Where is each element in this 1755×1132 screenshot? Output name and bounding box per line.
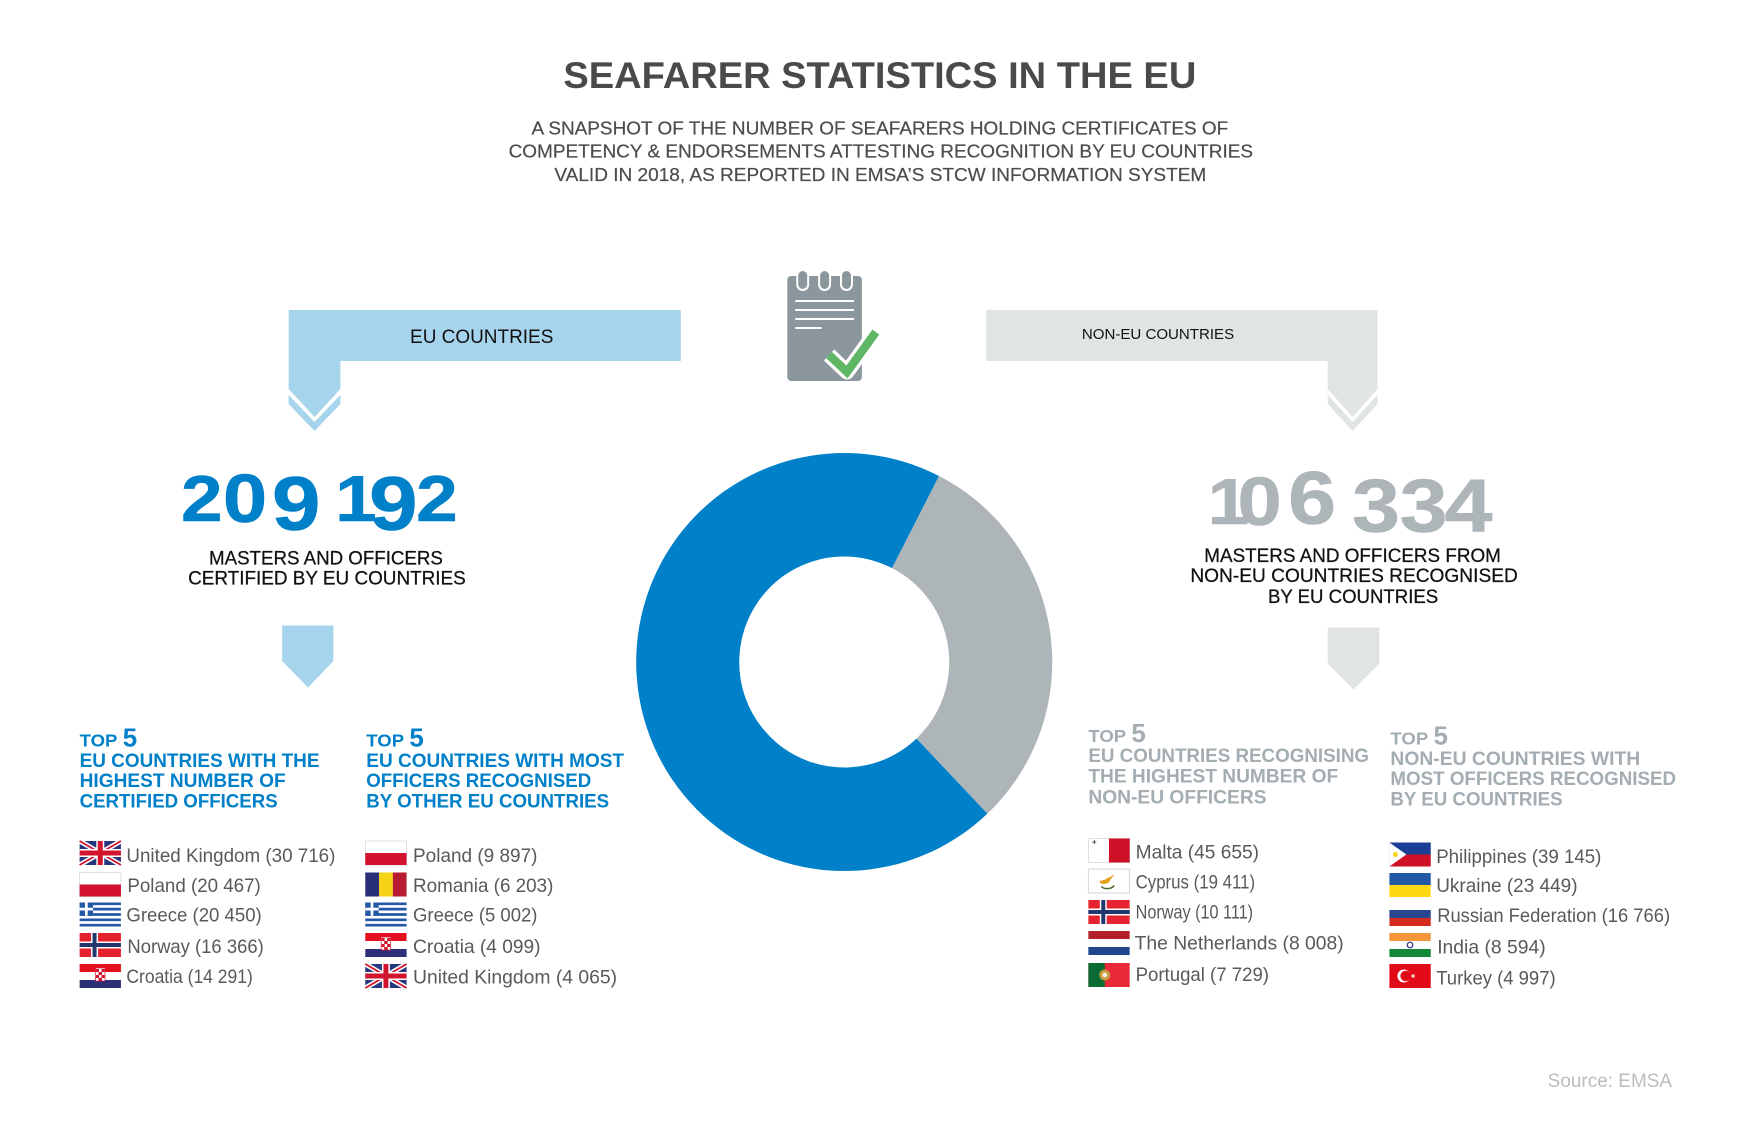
panel: top 5 EU recognised by other EU (365, 724, 624, 989)
list: Turkey (4 997) (1436, 968, 1556, 990)
heading: THE HIGHEST NUMBER OF (1088, 766, 1338, 788)
heading: EU COUNTRIES RECOGNISING (1088, 746, 1369, 767)
caption: non-EU: NON-EU COUNTRIES RECOGNISED (1190, 566, 1518, 587)
list: Croatia (14 291) (126, 967, 253, 988)
subtitle text block: COMPETENCY & ENDORSEMENTS ATTESTING RECOGNITION BY EU COUNTRIES (509, 140, 1253, 162)
big number: EU: 2 (181, 463, 223, 535)
panel: non-EU countries banner arrow (986, 310, 1377, 431)
big number: EU: 9 (369, 462, 418, 547)
list (365, 841, 617, 989)
list: United Kingdom (4 065) (413, 967, 617, 989)
big number: EU (181, 460, 458, 547)
arrow: EU down (282, 626, 333, 688)
panel: top 5 EU recognising non-EU (1088, 720, 1369, 987)
heading: EU COUNTRIES WITH THE (80, 751, 319, 772)
list: Poland (20 467) (127, 876, 261, 897)
heading: BY OTHER EU COUNTRIES (366, 791, 609, 813)
icon: notepad with check mark (787, 270, 876, 381)
heading: HIGHEST NUMBER OF (80, 771, 286, 792)
list: The Netherlands (8 008) (1135, 933, 1344, 955)
heading: MOST OFFICERS RECOGNISED (1390, 769, 1676, 790)
list: Russian Federation (16 766) (1437, 906, 1670, 927)
list: Romania (6 203) (413, 876, 553, 897)
panel: EU countries banner arrow (289, 310, 681, 431)
list (1088, 838, 1344, 987)
segment: non-EU recognised (892, 476, 1052, 814)
heading: TOP 5 (1390, 722, 1448, 751)
list: Ukraine (23 449) (1436, 876, 1578, 897)
caption: non-EU (1190, 546, 1518, 608)
panel: non-EU countries banner arrow: NON-EU COUNTRIES (1082, 326, 1234, 343)
heading: TOP 5 (366, 724, 424, 753)
list: Portugal (7 729) (1136, 965, 1269, 986)
big number: non-EU: 4 (1444, 465, 1493, 548)
heading: TOP 5 (80, 724, 137, 753)
big number: non-EU: 0 (1237, 463, 1282, 540)
list: Greece (20 450) (126, 905, 262, 927)
arrow: non-EU down (1328, 628, 1379, 690)
heading: NON-EU OFFICERS (1088, 787, 1267, 809)
list (80, 841, 335, 988)
heading: CERTIFIED OFFICERS (80, 791, 278, 813)
source note: Source: EMSA (1548, 1071, 1672, 1092)
title: SEAFARER STATISTICS IN THE EU (563, 55, 1196, 96)
heading (80, 724, 319, 813)
heading: OFFICERS RECOGNISED (366, 771, 591, 792)
segment: EU certified (636, 453, 987, 871)
caption: EU: MASTERS AND OFFICERS (209, 548, 443, 570)
big number: EU: 9 (272, 462, 320, 547)
list: Cyprus (19 411) (1136, 872, 1255, 894)
list: Croatia (4 099) (413, 937, 540, 958)
panel: top 5 EU certified (80, 724, 335, 988)
heading: NON-EU COUNTRIES WITH (1390, 749, 1640, 770)
heading (1088, 720, 1369, 809)
heading (366, 724, 624, 813)
big number: non-EU: 1 (1208, 466, 1249, 538)
panel: top 5 non-EU recognised (1389, 722, 1676, 990)
list: Poland (9 897) (413, 846, 537, 867)
big number: non-EU (1208, 457, 1493, 548)
heading: TOP 5 (1088, 720, 1146, 748)
list: Greece (5 002) (413, 905, 537, 927)
big number: EU: 1 (335, 463, 377, 535)
caption: non-EU: MASTERS AND OFFICERS FROM (1204, 546, 1501, 567)
list: Norway (10 111) (1136, 902, 1253, 924)
list (1389, 842, 1670, 990)
caption: non-EU: BY EU COUNTRIES (1268, 587, 1438, 608)
big number: non-EU: 3 (1352, 465, 1400, 548)
list: United Kingdom (30 716) (126, 846, 335, 867)
list: Malta (45 655) (1136, 842, 1259, 864)
caption: EU: CERTIFIED BY EU COUNTRIES (188, 568, 466, 590)
subtitle text block (509, 117, 1253, 185)
heading: BY EU COUNTRIES (1390, 789, 1563, 811)
list: Norway (16 366) (127, 937, 264, 958)
heading (1390, 722, 1676, 811)
subtitle text block: VALID IN 2018, AS REPORTED IN EMSA’S STCW INFORMATION SYSTEM (554, 164, 1206, 185)
panel: EU countries banner arrow: EU COUNTRIES (410, 327, 553, 348)
donut chart (636, 453, 1052, 871)
list: India (8 594) (1437, 937, 1546, 959)
caption: EU (188, 548, 466, 590)
big number: non-EU: 6 (1288, 457, 1336, 541)
big number: EU: 2 (416, 463, 458, 535)
list: Philippines (39 145) (1436, 847, 1601, 868)
heading: EU COUNTRIES WITH MOST (366, 751, 624, 772)
big number: EU: 0 (223, 460, 267, 537)
big number: non-EU: 3 (1400, 465, 1448, 548)
subtitle text block: A SNAPSHOT OF THE NUMBER OF SEAFARERS HOLDING CERTIFICATES OF (531, 117, 1228, 139)
